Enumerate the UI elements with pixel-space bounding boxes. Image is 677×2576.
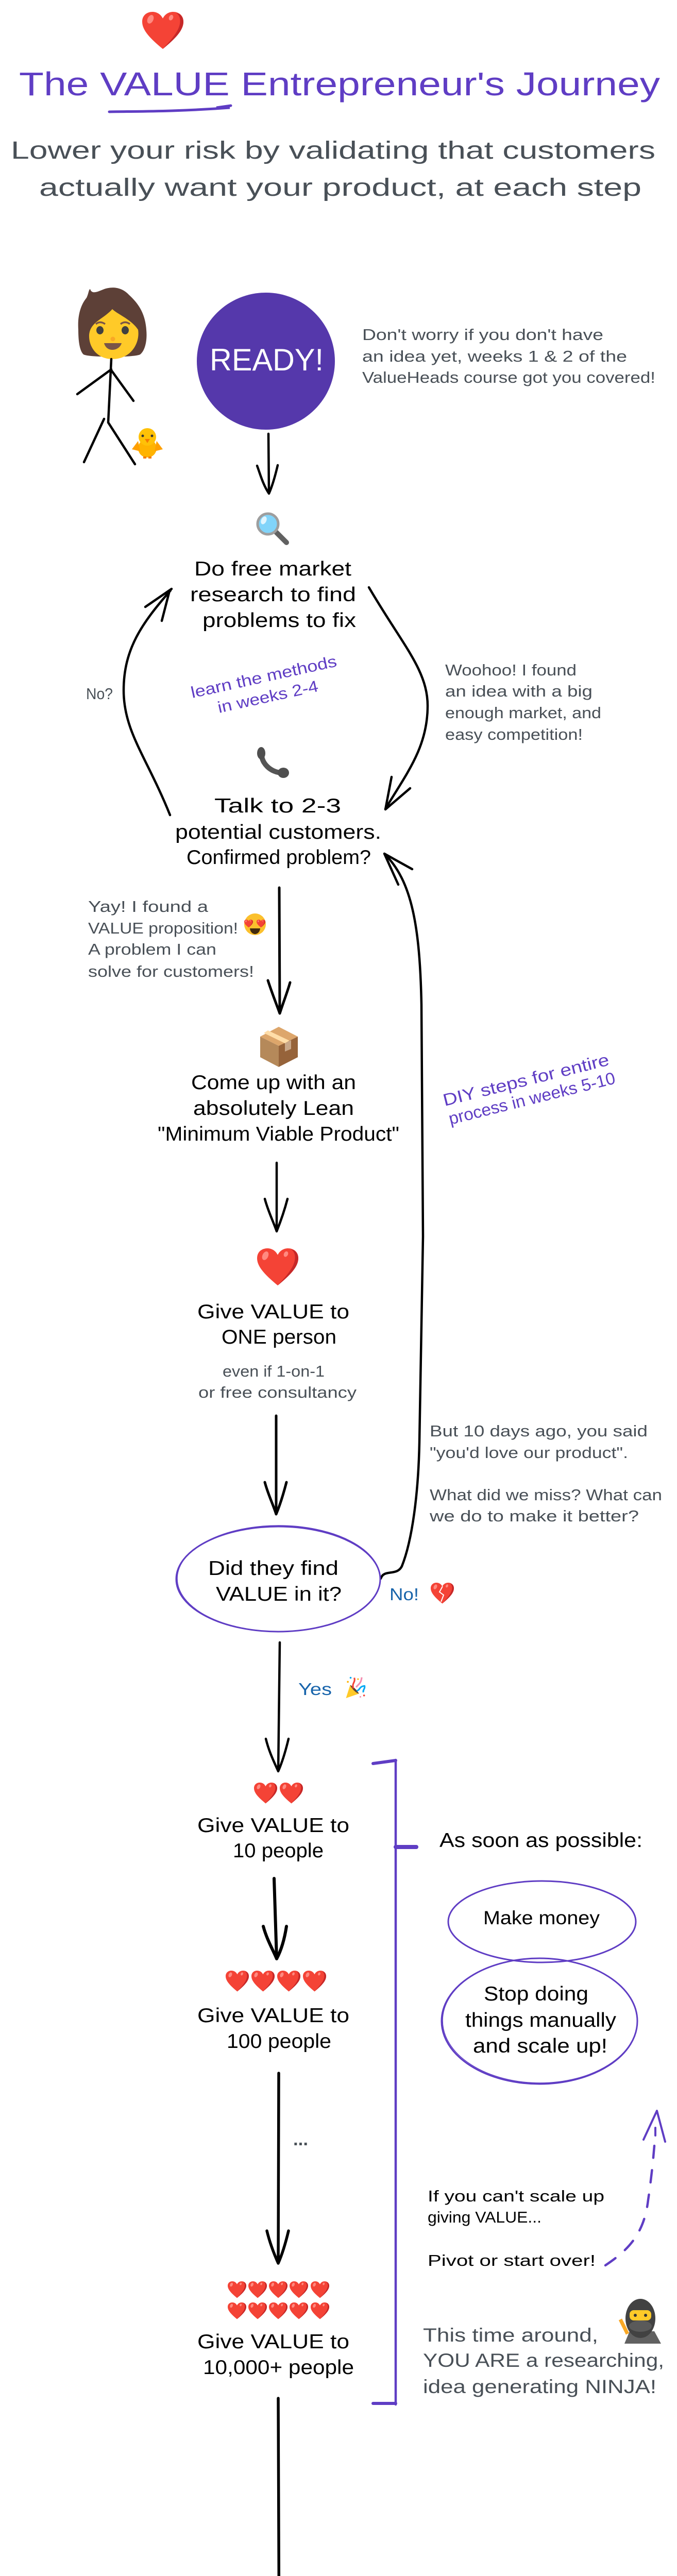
note: DIY steps: process in weeks 5-10 xyxy=(447,1069,617,1128)
text block: pivot: giving VALUE... xyxy=(428,2208,541,2226)
icon: telephone receiver xyxy=(257,747,289,778)
icon: chick xyxy=(132,428,163,457)
text block: but 10 days ago: But 10 days ago, you said xyxy=(430,1422,648,1440)
text block: yay: solve for customers! xyxy=(88,962,254,980)
text block: ninja xyxy=(423,2325,664,2397)
label: no broken heart xyxy=(390,1583,454,1604)
panel: make money xyxy=(448,1881,636,1962)
note: learn methods xyxy=(189,652,338,717)
step: market research: research to find xyxy=(190,584,356,606)
step: give value to 100: 100 people xyxy=(227,2030,331,2053)
stick figure: you today xyxy=(77,287,146,464)
text block: but 10 days ago: What did we miss? What can xyxy=(430,1486,662,1504)
icon: heart one person xyxy=(257,1248,298,1285)
step: minimum viable product: "Minimum Viable Product" xyxy=(158,1123,399,1145)
text block: pivot: If you can't scale up xyxy=(428,2187,604,2205)
heading: as soon as possible: As soon as possible: xyxy=(439,1829,642,1852)
panel: stop doing manually: Stop doing xyxy=(484,1983,588,2005)
step: market research xyxy=(190,558,357,632)
arrow: research to talk xyxy=(369,587,428,809)
icon: two hearts xyxy=(254,1783,303,1803)
icon: title heart xyxy=(142,12,183,49)
text block: yay: VALUE proposition! xyxy=(88,919,238,937)
arrow: no loop back to talk xyxy=(381,854,423,1579)
panel: stop doing manually: and scale up! xyxy=(473,2035,607,2057)
step: minimum viable product xyxy=(158,1072,399,1145)
panel: did they find value: Did they find xyxy=(208,1557,338,1580)
text block: yay: A problem I can xyxy=(88,940,216,958)
panel: READY circle: READY! xyxy=(210,343,324,377)
label: no: No? xyxy=(86,685,113,703)
icon: package box xyxy=(260,1027,298,1067)
step: market research: Do free market xyxy=(194,558,351,580)
icon: ten hearts xyxy=(228,2281,329,2319)
step: talk to customers: Talk to 2-3 xyxy=(214,795,341,817)
label: yes party xyxy=(298,1677,365,1699)
arrow: 100 to 10000 xyxy=(267,2073,289,2263)
label: no broken heart: No! xyxy=(390,1585,419,1604)
step: talk to customers: Confirmed problem? xyxy=(187,846,371,869)
subtitle: Lower your risk by validating that customers xyxy=(11,137,655,164)
bracket: as soon as possible xyxy=(373,1760,416,2404)
step: give value to one: ONE person xyxy=(222,1326,336,1348)
text block: ready note xyxy=(362,326,655,386)
step: give value to 10: 10 people xyxy=(233,1840,324,1862)
arrow: 10 to 100 xyxy=(263,1878,286,1959)
icon: heart eyes emoji xyxy=(244,913,266,935)
step: minimum viable product: Come up with an xyxy=(191,1072,356,1094)
text block: ninja: idea generating NINJA! xyxy=(423,2376,656,2397)
step: give value to 100 xyxy=(197,2005,349,2053)
arrow: ready to research xyxy=(257,434,278,494)
panel: did they find value: VALUE in it? xyxy=(216,1583,342,1605)
text block: but 10 days ago: we do to make it better? xyxy=(429,1507,639,1525)
arrow: talk to MVP xyxy=(268,888,290,1013)
step: give value to one: even if 1-on-1 xyxy=(223,1362,325,1380)
step: give value to 10: Give VALUE to xyxy=(197,1815,349,1837)
subtitle xyxy=(11,137,655,201)
step: give value to 100: Give VALUE to xyxy=(197,2005,349,2027)
step: give value to one: Give VALUE to xyxy=(197,1301,349,1323)
arrow: to success xyxy=(269,2398,292,2576)
icon: ninja xyxy=(620,2299,661,2344)
step: give value to 10000 xyxy=(197,2331,354,2379)
arrow: no loop back to research xyxy=(124,589,172,815)
text block: yay: Yay! I found a xyxy=(88,897,209,916)
text block: but 10 days ago: "you'd love our product". xyxy=(430,1444,628,1462)
step: give value to 10000: Give VALUE to xyxy=(197,2331,349,2353)
text block: but 10 days ago xyxy=(429,1422,662,1525)
title: The VALUE Entrepreneur's Journey xyxy=(19,65,660,103)
label: yes party: Yes xyxy=(298,1680,332,1699)
panel: make money: Make money xyxy=(483,1907,600,1928)
arrow: dashed pivot xyxy=(605,2111,665,2265)
text block: woohoo: an idea with a big xyxy=(445,682,593,700)
text block: pivot xyxy=(428,2187,604,2269)
text block: ready note: ValueHeads course got you covered! xyxy=(362,368,655,386)
panel: stop doing manually: things manually xyxy=(465,2009,617,2031)
text block: woohoo: enough market, and xyxy=(445,704,601,722)
text block: pivot: Pivot or start over! xyxy=(428,2251,596,2269)
text block: woohoo: easy competition! xyxy=(445,725,583,743)
icon: four hearts xyxy=(226,1971,326,1992)
step: talk to customers xyxy=(175,795,381,869)
note: learn methods: learn the methods xyxy=(189,652,338,702)
text block: woohoo xyxy=(445,661,601,743)
text block: woohoo: Woohoo! I found xyxy=(445,661,577,679)
text block: ninja: This time around, xyxy=(423,2325,598,2346)
icon: magnifying glass xyxy=(258,514,286,543)
step: give value to 10000: 10,000+ people xyxy=(203,2357,354,2379)
step: market research: problems to fix xyxy=(202,609,357,632)
arrow: MVP to one person xyxy=(265,1163,287,1231)
subtitle: actually want your product, at each step xyxy=(39,174,641,201)
step: give value to one: or free consultancy xyxy=(198,1383,357,1401)
note: learn methods: in weeks 2-4 xyxy=(216,677,320,717)
title xyxy=(19,65,660,112)
text block: ready note: an idea yet, weeks 1 & 2 of the xyxy=(362,347,627,365)
arrow: yes xyxy=(266,1642,289,1771)
text block: ninja: YOU ARE a researching, xyxy=(423,2350,664,2371)
panel: READY circle xyxy=(197,293,335,430)
label: ellipsis: ... xyxy=(293,2130,308,2149)
arrow: one person to question xyxy=(265,1416,286,1514)
note: DIY steps: DIY steps for entire xyxy=(441,1050,611,1110)
step: give value to one xyxy=(197,1301,357,1401)
step: minimum viable product: absolutely Lean xyxy=(193,1097,354,1120)
text block: yay xyxy=(88,897,254,980)
panel: stop doing manually xyxy=(442,1958,637,2084)
step: talk to customers: potential customers. xyxy=(175,821,381,843)
text block: ready note: Don't worry if you don't have xyxy=(362,326,603,344)
panel: did they find value xyxy=(176,1526,380,1632)
step: give value to 10 xyxy=(197,1815,349,1862)
